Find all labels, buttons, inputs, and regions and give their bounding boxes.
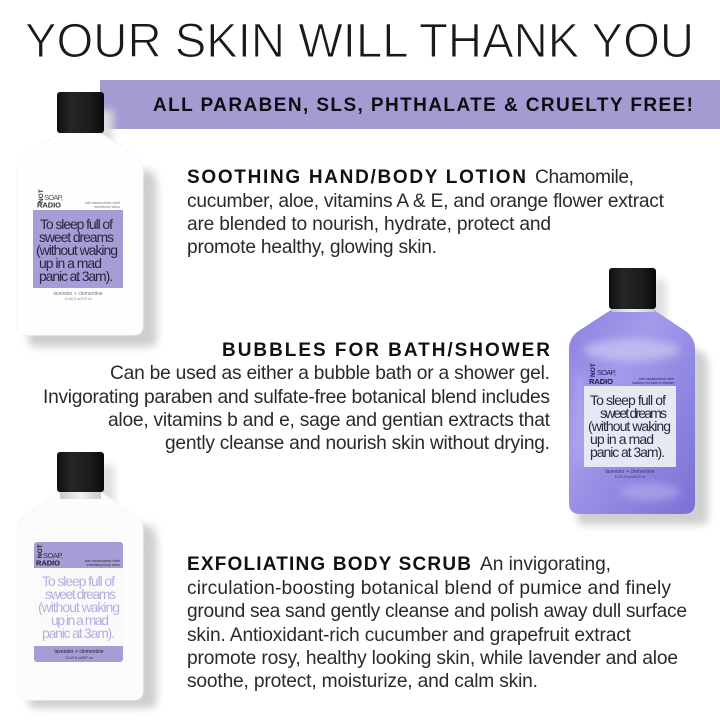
product: hand/body lotion bottle: To sleep full of xyxy=(40,216,113,232)
product: bubble bath bottle: anti-mania/stress relief xyxy=(639,377,674,381)
text block: exfoliating body scrub: An invigorating, xyxy=(480,554,611,575)
product: hand/body lotion bottle: 12.68 fl oz/375 ml xyxy=(64,297,92,301)
banner: free-from claim: ALL PARABEN, SLS, PHTHALATE & CRUELTY FREE! xyxy=(153,95,693,116)
product: hand/body lotion bottle: anti-mania/stress relief xyxy=(85,201,120,205)
product: bubble bath bottle xyxy=(569,268,708,525)
text block: exfoliating body scrub: ground sea sand gently cleanse and polish away dull surface xyxy=(187,601,687,622)
text block: exfoliating body scrub: EXFOLIATING BODY SCRUB xyxy=(187,554,471,575)
product: bubble bath bottle: RADIO xyxy=(589,377,613,386)
text block: bubbles for bath/shower xyxy=(43,340,551,454)
text block: soothing hand/body lotion: cucumber, aloe, vitamins A & E, and orange flower extract xyxy=(187,191,665,212)
product: body scrub bottle: SOAP, xyxy=(43,551,63,560)
title: YOUR SKIN WILL THANK YOU xyxy=(25,15,694,68)
product: hand/body lotion bottle: (without waking xyxy=(36,242,118,258)
product: body scrub bottle: up in a mad xyxy=(51,612,109,628)
product: body scrub bottle: lavender + clementine xyxy=(54,649,104,655)
product: bubble bath bottle: panic at 3am). xyxy=(590,444,665,460)
product: body scrub bottle: NOT xyxy=(37,544,44,558)
product: bubble bath bottle: up in a mad xyxy=(590,431,654,447)
product: bubble bath bottle: 13.81 fl oz/402.5 ml xyxy=(615,475,645,479)
text block: exfoliating body scrub: circulation-boosting botanical blend of pumice and finely xyxy=(187,578,671,599)
product: hand/body lotion bottle: sweet dreams xyxy=(39,229,114,245)
product: body scrub bottle: To sleep full of xyxy=(42,573,115,589)
banner: free-from claim xyxy=(100,80,720,129)
text block: exfoliating body scrub xyxy=(187,554,687,692)
text block: bubbles for bath/shower: BUBBLES FOR BATH/SHOWER xyxy=(222,340,550,361)
text block: bubbles for bath/shower: Invigorating paraben and sulfate-free botanical blend includes xyxy=(43,387,550,408)
product: bubble bath bottle: sweet dreams xyxy=(600,405,667,421)
text block: soothing hand/body lotion: Chamomile, xyxy=(535,167,634,188)
product: body scrub bottle xyxy=(17,452,157,708)
product: bubble bath bottle: NOT xyxy=(590,363,597,377)
product: body scrub bottle: sweet dreams xyxy=(45,586,116,602)
product: hand/body lotion bottle: panic at 3am). xyxy=(39,268,113,284)
product: body scrub bottle: anti-mania/stress relief xyxy=(85,559,120,563)
product: hand/body lotion bottle: lavender + clementine xyxy=(53,291,103,297)
product: hand/body lotion bottle: hand/body lotion xyxy=(94,205,120,209)
product: bubble bath bottle: lavender + clementine xyxy=(605,469,655,475)
product: bubble bath bottle: (without waking xyxy=(588,418,671,434)
product: hand/body lotion bottle: RADIO xyxy=(37,200,61,210)
product: body scrub bottle: RADIO xyxy=(36,558,60,568)
text block: exfoliating body scrub: promote rosy, healthy looking skin, while lavender and aloe xyxy=(187,648,678,669)
text block: exfoliating body scrub: soothe, protect, moisturize, and calm skin. xyxy=(187,671,538,692)
text block: bubbles for bath/shower: gently cleanse and nourish skin without drying. xyxy=(165,433,550,454)
product: hand/body lotion bottle: SOAP, xyxy=(44,193,63,202)
text block: soothing hand/body lotion: are blended to nourish, hydrate, protect and xyxy=(187,214,551,235)
product: body scrub bottle: exfoliating body wash xyxy=(87,563,120,567)
product: hand/body lotion bottle: up in a mad xyxy=(39,255,102,271)
product: body scrub bottle: panic at 3am). xyxy=(42,625,115,641)
product: bubble bath bottle: To sleep full of xyxy=(590,392,666,408)
text block: bubbles for bath/shower: aloe, vitamins b and e, sage and gentian extracts that xyxy=(108,410,551,431)
product: body scrub bottle: (without waking xyxy=(38,599,120,615)
product: hand/body lotion bottle: NOT xyxy=(38,189,45,203)
product: bubble bath bottle: bubbles for bath or shower xyxy=(633,381,675,385)
text block: bubbles for bath/shower: Can be used as either a bubble bath or a shower gel. xyxy=(110,363,550,384)
product: bubble bath bottle: SOAP, xyxy=(597,368,616,377)
text block: soothing hand/body lotion: SOOTHING HAND/BODY LOTION xyxy=(187,167,526,188)
product: body scrub bottle: 13.43 fl oz/397 ml xyxy=(65,656,93,660)
text block: soothing hand/body lotion xyxy=(187,167,665,258)
text block: soothing hand/body lotion: promote healthy, glowing skin. xyxy=(187,237,437,258)
text block: exfoliating body scrub: skin. Antioxidant-rich cucumber and grapefruit extract xyxy=(187,625,632,646)
product: hand/body lotion bottle xyxy=(17,92,157,347)
